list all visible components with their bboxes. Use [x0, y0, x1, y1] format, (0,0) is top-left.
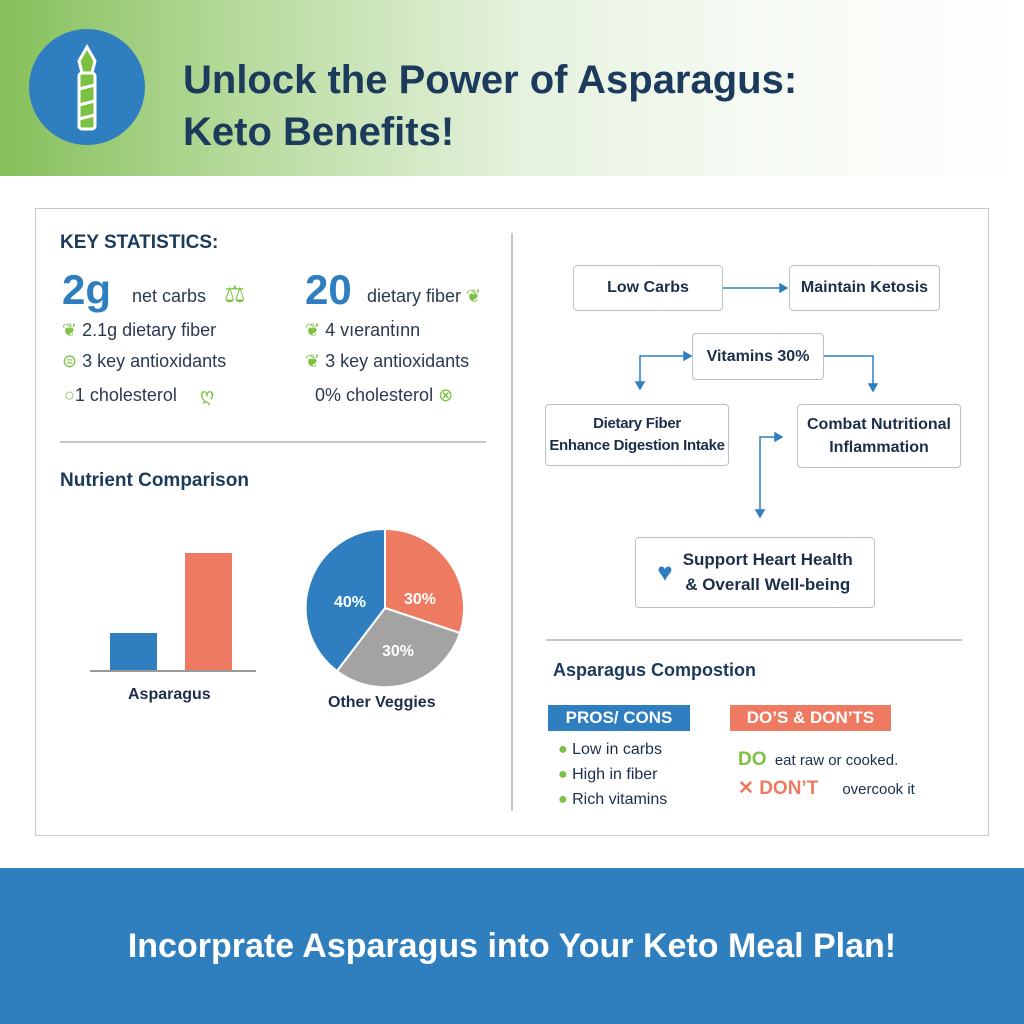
pros/cons: ● High in fiber: [558, 766, 658, 783]
stats right: dietary fiber ❦: [367, 286, 481, 306]
footer banner: [0, 868, 1024, 1024]
stats right: 20: [305, 266, 352, 313]
stats left: 2g: [62, 266, 111, 313]
stats left: ❦ 2.1g dietary fiber: [62, 320, 216, 340]
title: Keto Benefits!: [183, 110, 454, 154]
footer banner: Incorprate Asparagus into Your Keto Meal Plan!: [128, 927, 896, 965]
icon: asparagus circle: [29, 29, 145, 145]
bar chart: Asparagus: [128, 686, 211, 703]
flowchart: [545, 265, 961, 608]
flowchart: Inflammation: [829, 439, 929, 456]
stats left: ○1 cholesterol ღ: [64, 385, 214, 405]
pros/cons: ● Rich vitamins: [558, 791, 667, 808]
stats right: 0% cholesterol ⊗: [315, 385, 453, 405]
stats left: ⊜ 3 key antioxidants: [62, 351, 226, 371]
pros/cons: ● Low in carbs: [558, 741, 662, 758]
header: [0, 0, 1024, 176]
heading: key statistics: KEY STATISTICS:: [60, 232, 218, 253]
stats left: ⚖: [224, 281, 246, 308]
heading: composition: Asparagus Compostion: [553, 660, 756, 680]
pie chart: 30%: [382, 643, 414, 660]
do's & don'ts: ✕ DON’T overcook it: [738, 778, 915, 799]
flowchart: Combat Nutritional: [807, 416, 951, 433]
bar chart: [90, 553, 256, 703]
title: [183, 58, 797, 154]
flowchart: Support Heart Health: [683, 550, 853, 569]
flowchart: ♥: [657, 557, 673, 587]
stats left: net carbs: [132, 286, 206, 306]
stats right: ❦ 4 vıeranṫınn: [305, 320, 420, 340]
pie chart: 40%: [334, 594, 366, 611]
flowchart: & Overall Well-being: [685, 574, 850, 594]
panel: main: [35, 208, 989, 836]
flowchart: Vitamins 30%: [707, 348, 809, 365]
stats left: [62, 266, 246, 406]
pie chart: [306, 530, 464, 711]
pie chart: 30%: [404, 591, 436, 608]
pros/cons: PROS/ CONS: [566, 708, 672, 727]
flowchart: Enhance Digestion Intake: [549, 437, 725, 454]
pros/cons: [548, 705, 690, 808]
flowchart: Maintain Ketosis: [801, 279, 928, 296]
pie chart: Other Veggies: [328, 694, 436, 711]
do's & don'ts: DO eat raw or cooked.: [738, 749, 898, 770]
stats right: [305, 266, 481, 405]
title: Unlock the Power of Asparagus:: [183, 58, 797, 102]
flowchart: Low Carbs: [607, 279, 689, 296]
flowchart: Dietary Fiber: [593, 415, 681, 432]
heading: nutrient comparison: Nutrient Comparison: [60, 470, 249, 491]
stats right: ❦ 3 key antioxidants: [305, 351, 469, 371]
do's & don'ts: [730, 705, 915, 799]
do's & don'ts: DO’S & DON’TS: [747, 708, 874, 727]
